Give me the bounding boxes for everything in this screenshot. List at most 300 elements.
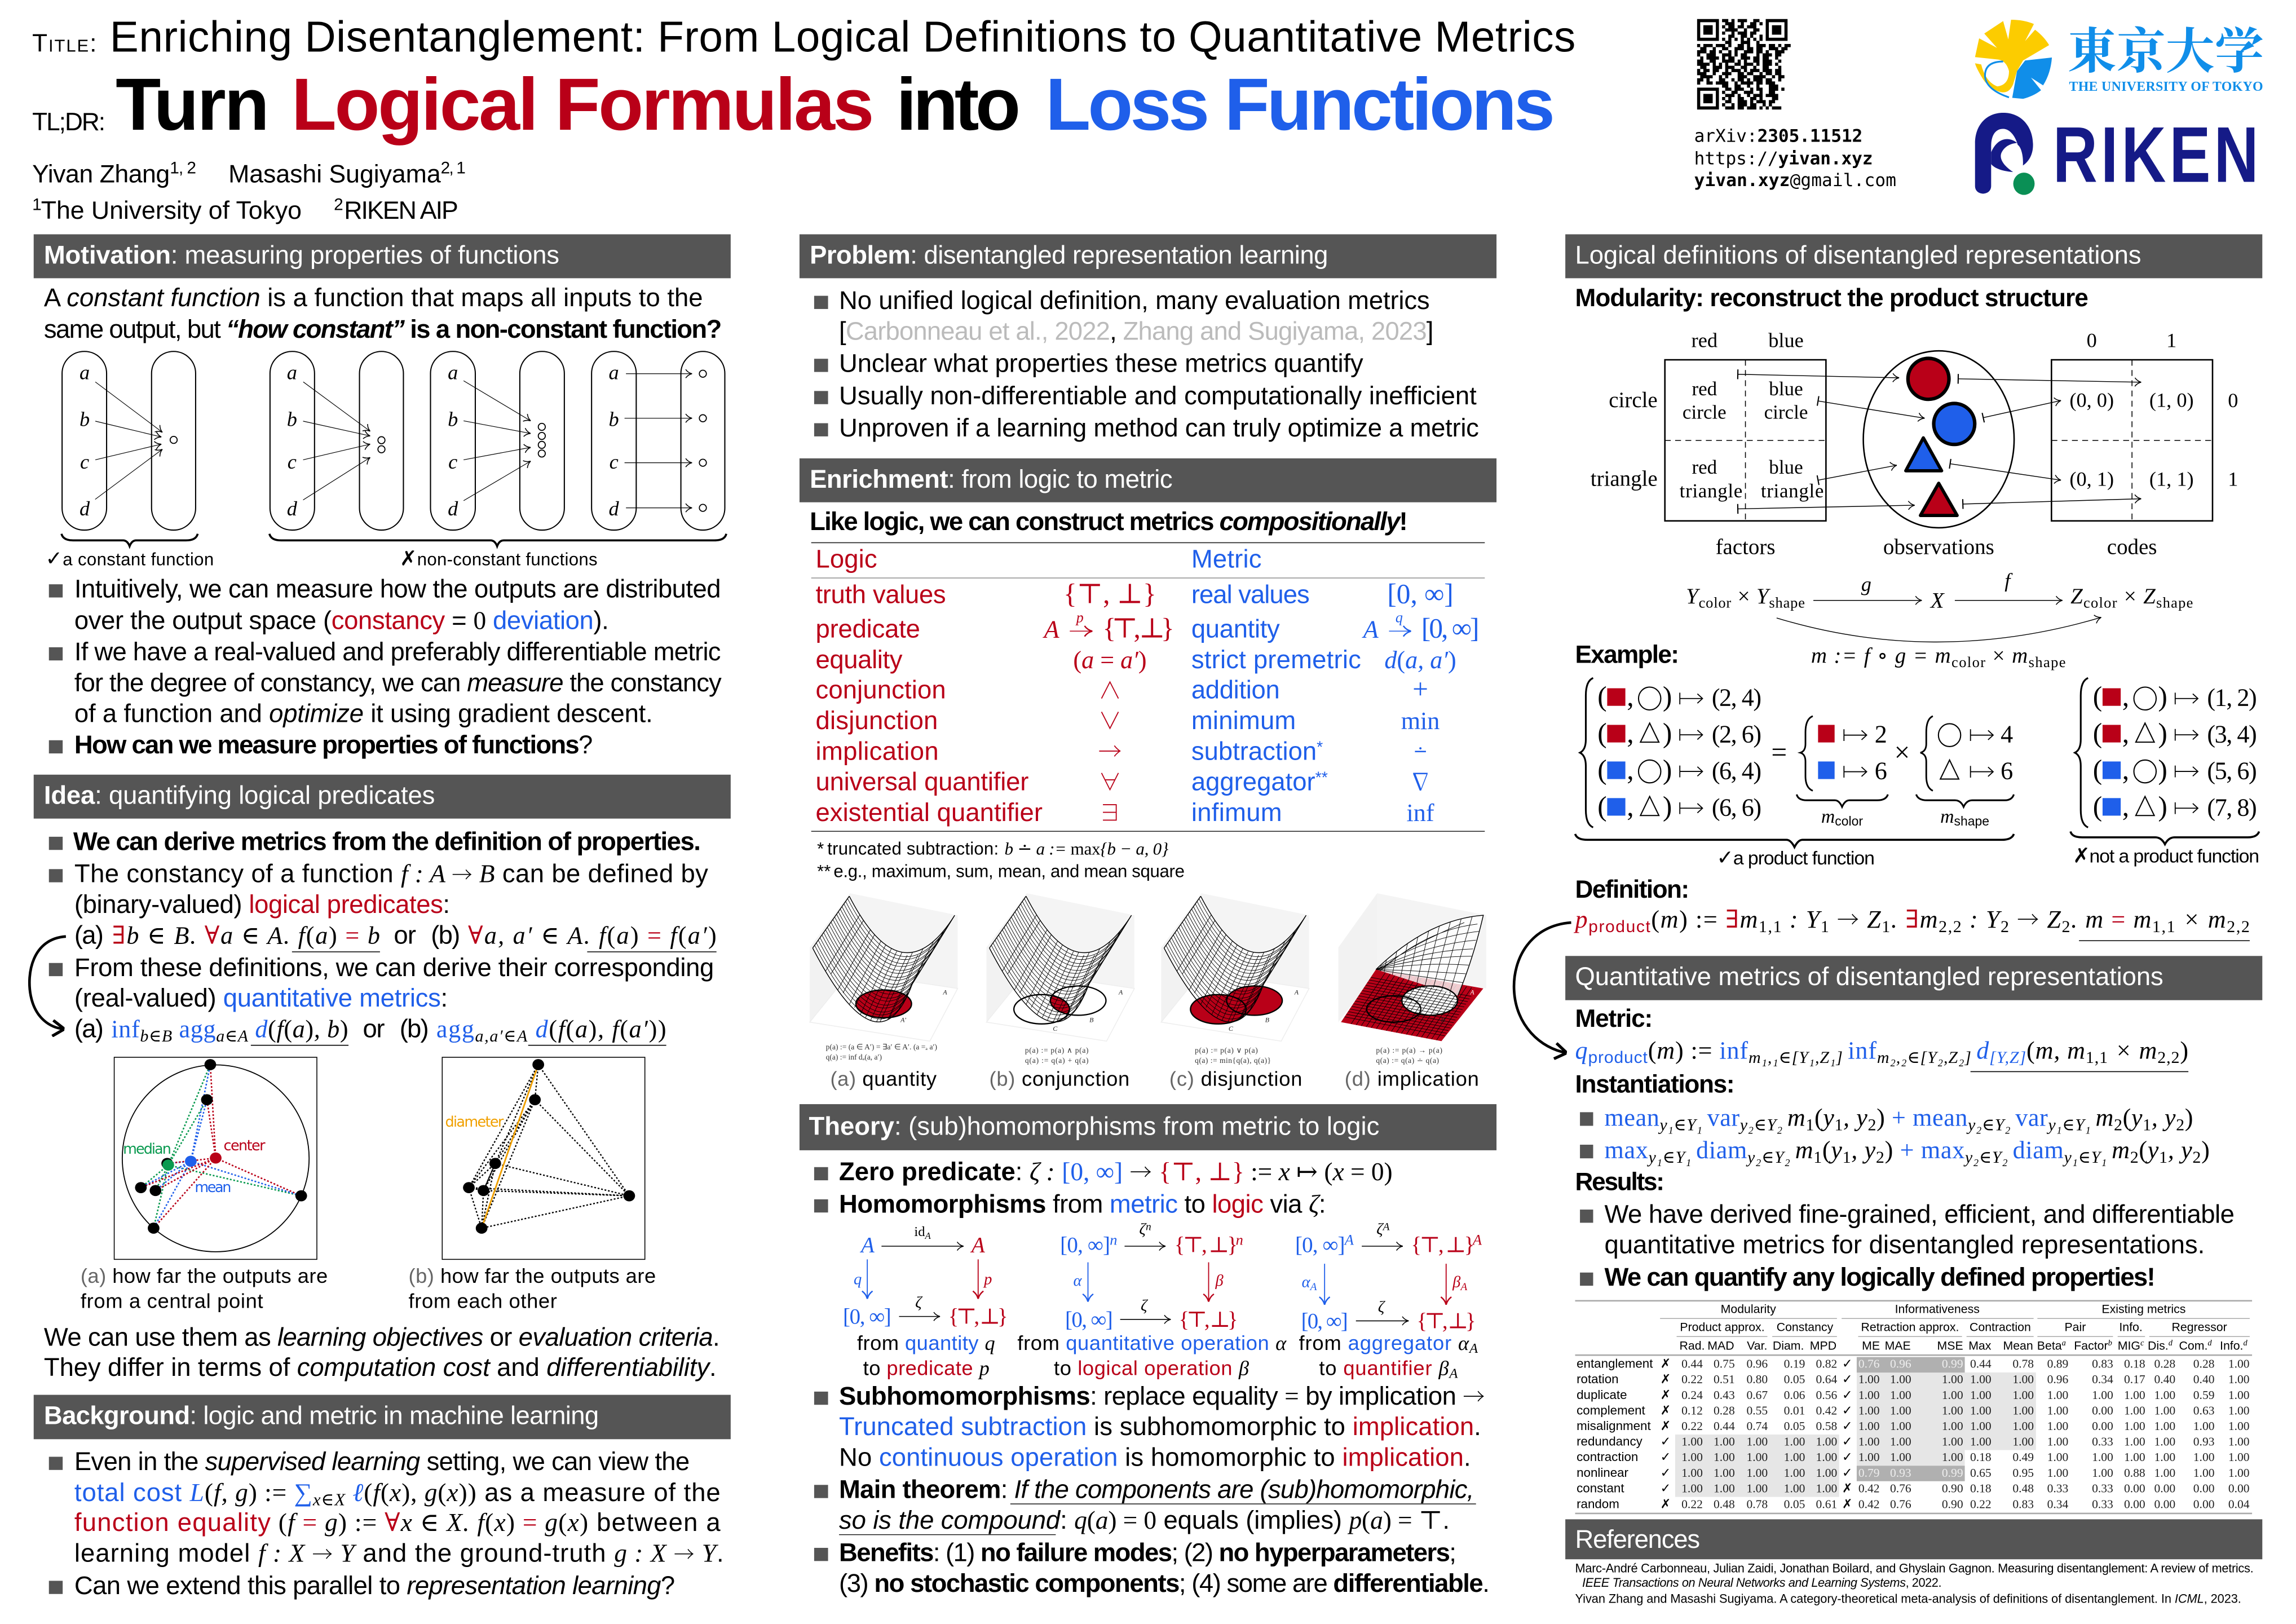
captions under charts: (a) how far the outputs are: [81, 1264, 328, 1287]
table values: 0.99: [1942, 1357, 1963, 1371]
icon: QR code: [1697, 21, 1791, 108]
table values: 1.00: [1858, 1450, 1880, 1464]
icon: ginkgo leaf: [1975, 20, 2052, 99]
diagram labels a b c d: b: [287, 408, 297, 431]
table values: 0.90: [1942, 1482, 1963, 1495]
diagram: quantity to predicate: id: [914, 1224, 925, 1239]
captions under charts: [81, 1264, 656, 1313]
table values: 0.56: [1816, 1388, 1837, 1402]
table group headers: MIG: [2118, 1339, 2144, 1353]
example: not a product function: (: [2093, 791, 2102, 822]
table values: 0.04: [2228, 1497, 2250, 1511]
check marks: ✓: [1661, 1450, 1671, 1464]
table values: 1.00: [1942, 1435, 1963, 1449]
diagram: quantity to predicate: [843, 1224, 1008, 1380]
check marks: ✗: [1661, 1372, 1671, 1387]
table group headers: MPD: [1810, 1339, 1836, 1353]
check marks: ✓: [1842, 1372, 1853, 1387]
example: product function: ,: [1627, 754, 1634, 785]
instantiation formulas: (: [2123, 1104, 2131, 1132]
metric column: +: [1412, 674, 1428, 705]
chart: conjunction surface: p(a) := p(a) ∧ p(a): [1025, 1046, 1089, 1054]
table group headers: d: [2207, 1339, 2212, 1348]
metric column: min: [1401, 707, 1440, 735]
table values: 1.00: [2154, 1435, 2175, 1449]
diagram: aggregator homomorphism: A: [1344, 1231, 1354, 1248]
table values: 0.22: [1970, 1497, 1992, 1511]
brace: non-constant functions: [270, 534, 726, 546]
check marks: ✗: [1842, 1481, 1853, 1496]
check marks: ✗: [1661, 1419, 1671, 1433]
table values: 1.00: [2047, 1435, 2068, 1449]
formula: logical product predicate: 2: [2061, 917, 2070, 936]
diagram: operation homomorphism: [1017, 1221, 1287, 1380]
logic column: ∨: [1098, 702, 1121, 736]
table values: 1.00: [2047, 1450, 2068, 1464]
table values: 0.01: [1784, 1404, 1805, 1417]
table values: 1.00: [2228, 1388, 2250, 1402]
instantiation formulas: y: [1823, 1104, 1834, 1132]
theory bullets: Main theorem: If the components are (sub)homomorphic,: [839, 1475, 1474, 1504]
example: not a product function: (: [2093, 718, 2102, 749]
instantiation formulas: y₁∈Y₁: [1658, 1115, 1707, 1134]
table values: 1.00: [2124, 1435, 2145, 1449]
instantiation formulas: 2: [1867, 1115, 1876, 1134]
problem bullets: No unified logical definition, many evaluation metrics: [839, 286, 1430, 315]
diagram labels a b c d: d: [287, 497, 298, 520]
table values: 1.00: [1681, 1482, 1703, 1495]
diagram: operation homomorphism: β: [1215, 1272, 1224, 1290]
reference list: Marc-André Carbonneau, Julian Zaidi, Jonathan Boilard, and Ghyslain Gagnon. Measuring disentanglement: A review of metrics.: [1575, 1561, 2254, 1576]
instantiation formulas: (: [1814, 1104, 1823, 1132]
table values: 1.00: [1816, 1466, 1837, 1480]
panel: problem: [800, 235, 1496, 442]
diagram: operation homomorphism: n: [1146, 1221, 1151, 1233]
subheading: Like logic, we can construct metrics compositionally!: [810, 507, 1408, 536]
arXiv id: arXiv:2305.11512: [1694, 126, 1862, 147]
diagram: operation homomorphism: ζ: [1141, 1297, 1149, 1314]
chart: conjunction surface: C: [1053, 1025, 1058, 1032]
codes box: [2051, 329, 2238, 559]
diagram: factors observations codes: [1591, 329, 2238, 559]
definitions text: ∃b ∈ B. ∀a ∈ A. f(a) = b: [112, 922, 380, 950]
chart: implication surface: A: [1469, 988, 1474, 996]
chart: quantity surface: q(a) := inf dₐ(a, a′): [826, 1053, 882, 1061]
instantiation formulas: 2: [1876, 1148, 1884, 1167]
chart: implication surface: q(a) := q(a) ∸ q(a): [1376, 1056, 1439, 1065]
diagram: operation homomorphism: to logical operation β: [1054, 1357, 1249, 1380]
theory bullets: so is the compound: q(a) = 0 equals (implies) p(a) = ⊤.: [839, 1506, 1450, 1534]
logic column: (a = a′): [1073, 646, 1147, 674]
example: product function: 4: [2001, 721, 2013, 748]
table values: 0.18: [1970, 1482, 1992, 1495]
heading: enrichment: Enrichment: from logic to metric: [810, 465, 1173, 493]
bullet list: for the degree of constancy, we can measure the constancy: [74, 668, 722, 697]
example: product function: (2, 6): [1712, 721, 1761, 748]
caption: non-constant functions: ✗non-constant functions: [400, 546, 598, 570]
panel: references: [1565, 1519, 2262, 1606]
table values: 0.34: [2092, 1373, 2113, 1386]
metric column: aggregator: [1191, 767, 1315, 796]
table values: 1.00: [2047, 1388, 2068, 1402]
table values: 1.00: [1816, 1435, 1837, 1449]
table values: 0.19: [1784, 1357, 1805, 1371]
formula: quantitative product metric: ): [2180, 1036, 2188, 1064]
instantiation formulas: 2: [2192, 1148, 2201, 1167]
chart: implication surface: B: [1441, 1016, 1445, 1024]
example: product function: ,: [1627, 718, 1634, 749]
table values: 1.00: [2228, 1373, 2250, 1386]
table values: 0.48: [2012, 1482, 2034, 1495]
definitions text: (real-valued) quantitative metrics:: [74, 983, 448, 1012]
chart: conjunction surface: B: [1089, 1016, 1094, 1024]
logic column: ∧: [1098, 672, 1121, 705]
formula: logical product predicate: (: [1651, 906, 1659, 933]
table group headers: Existing metrics: [2101, 1303, 2185, 1316]
chart: quantity surface: (a) quantity: [830, 1067, 937, 1091]
instantiation formulas: diam: [2013, 1136, 2064, 1164]
chart: distance to each other: diameter: [445, 1113, 504, 1130]
instantiation formulas: y: [2148, 1136, 2158, 1164]
row names: complement: [1577, 1403, 1646, 1417]
metric column: subtraction: [1191, 736, 1317, 765]
table values: 0.49: [2012, 1450, 2034, 1464]
logic column: {⊤, ⊥}: [1102, 613, 1175, 644]
instantiation formulas: 1: [2159, 1148, 2167, 1167]
table values: 0.44: [1970, 1357, 1992, 1371]
definitions text: inf: [111, 1015, 140, 1043]
table values: 0.06: [1784, 1388, 1805, 1402]
check marks: ✗: [1661, 1403, 1671, 1418]
example: not a product function: ✗not a product function: [2073, 843, 2259, 867]
check marks: ✓: [1842, 1419, 1853, 1433]
table group headers: Contraction: [1970, 1321, 2031, 1334]
table values: 1.00: [1858, 1419, 1880, 1433]
instantiation formulas: m: [2112, 1136, 2130, 1164]
table footnotes: b ∸ a := max{b − a, 0}: [1005, 839, 1169, 859]
authors: Yivan Zhang: [32, 160, 170, 188]
subheading: example: Example:: [1575, 641, 1679, 668]
diagram labels a b c d: a: [80, 361, 90, 384]
table values: 0.64: [1816, 1373, 1837, 1386]
row names: constant: [1577, 1481, 1624, 1495]
results bullets: We have derived fine-grained, efficient, and differentiable: [1604, 1199, 2235, 1228]
diagram: aggregator homomorphism: [0, ∞]: [1301, 1309, 1348, 1333]
diagram labels a b c d: c: [80, 451, 89, 473]
row names: [1577, 1357, 1653, 1511]
diagram: function composition: Y: [1686, 584, 1698, 608]
example: product function: ): [1663, 718, 1672, 749]
contact links: [1694, 126, 1896, 191]
row names: contraction: [1577, 1450, 1638, 1464]
results bullets: quantitative metrics for disentangled representations.: [1604, 1230, 2205, 1259]
definitions text: d(f(a), f(a′)): [536, 1015, 666, 1043]
factors box: [1591, 329, 1826, 559]
chart: disjunction surface: q(a) := min{q(a), q(a)}: [1195, 1056, 1271, 1065]
table values: 1.00: [2228, 1450, 2250, 1464]
table values: 1.00: [1714, 1482, 1735, 1495]
table values: 0.33: [2047, 1482, 2068, 1495]
table group headers: Dis.: [2148, 1339, 2173, 1353]
table values: 0.76: [1890, 1482, 1911, 1495]
instantiation formulas: ): [1876, 1104, 1891, 1132]
row names: redundancy: [1577, 1435, 1643, 1449]
table values: 1.00: [2092, 1388, 2113, 1402]
table values: 1.00: [2124, 1419, 2145, 1433]
underline: product equation: [2079, 940, 2250, 941]
definitions text: (a): [74, 1014, 104, 1043]
formula: logical product predicate: 2,2: [2227, 917, 2250, 936]
table values: 1.00: [2012, 1388, 2034, 1402]
instantiation formulas: m: [1795, 1136, 1813, 1164]
formula: quantitative product metric: q: [1575, 1036, 1588, 1064]
table group headers: Max: [1968, 1339, 1992, 1353]
table values: 1.00: [1746, 1482, 1768, 1495]
instantiation formulas: m: [1787, 1104, 1805, 1132]
table values: 1.00: [2124, 1388, 2145, 1402]
factors box: triangle: [1591, 467, 1658, 491]
example: not a product function: [2070, 678, 2259, 867]
example: not a product function: (1, 2): [2207, 684, 2257, 712]
table footnotes: **: [817, 862, 831, 881]
tldr headline: Logical Formulas: [292, 63, 874, 145]
japanese wordmark: 東京大学: [2068, 12, 2264, 82]
heading: references: [1565, 1519, 2262, 1559]
chart: disjunction surface: B: [1265, 1016, 1270, 1024]
definitions text: (b): [431, 921, 460, 950]
instantiation formulas: , y: [1851, 1136, 1876, 1164]
row names: nonlinear: [1577, 1466, 1629, 1480]
instantiation formulas: ): [2201, 1136, 2210, 1164]
check marks: ✓: [1842, 1403, 1853, 1418]
table values: 1.00: [1681, 1450, 1703, 1464]
instantiation formulas: , y: [2152, 1104, 2176, 1132]
formula: logical product predicate: = m: [2111, 906, 2151, 933]
metric column: real values: [1191, 580, 1310, 608]
definitions text: From these definitions, we can derive their corresponding: [74, 953, 714, 982]
table group headers: Pair: [2064, 1321, 2086, 1334]
table values: 1.00: [2012, 1404, 2034, 1417]
instantiation formulas: max: [1604, 1136, 1648, 1164]
example: product function: color: [1835, 814, 1863, 828]
heading: background: [34, 1395, 731, 1439]
authors: 1, 2: [170, 159, 196, 178]
panel: idea: [29, 775, 731, 1382]
formula: m decomposition: m: [2012, 643, 2028, 668]
factors box: red: [1692, 329, 1717, 351]
instantiation formulas: + mean: [1892, 1104, 1967, 1132]
affiliations: The University of Tokyo: [41, 197, 302, 224]
table values: 0.75: [1714, 1357, 1735, 1371]
instantiation formulas: y: [1831, 1136, 1842, 1164]
row names: random: [1577, 1497, 1619, 1511]
table values: 0.17: [2124, 1373, 2145, 1386]
heading: motivation: [34, 235, 731, 278]
captions under charts: from each other: [409, 1290, 557, 1313]
diagram labels a b c d: c: [448, 451, 457, 473]
observations ellipse: observations: [1883, 535, 1994, 559]
instantiation formulas: m: [2096, 1104, 2113, 1132]
table rules: [1660, 1318, 2250, 1336]
example: product function: [1575, 678, 2014, 870]
title block: [32, 14, 1575, 224]
table group headers: d: [2169, 1339, 2173, 1348]
codes box: codes: [2107, 535, 2157, 559]
table values: 1.00: [1746, 1435, 1768, 1449]
chart: distance to central point: median: [123, 1140, 171, 1157]
brace: constant function: [61, 534, 198, 546]
table values: 0.40: [2193, 1373, 2215, 1386]
affiliations: RIKEN AIP: [344, 197, 458, 224]
table group headers: Product approx.: [1680, 1321, 1765, 1334]
table: metric results: [1575, 1301, 2252, 1513]
instantiation formulas: [1580, 1104, 2210, 1167]
table values: 1.00: [2228, 1466, 2250, 1480]
logic column: equality: [815, 645, 903, 674]
table values: 0.05: [1784, 1497, 1805, 1511]
table group headers: a: [2062, 1339, 2066, 1348]
table values: 1.00: [2092, 1450, 2113, 1464]
table values: 0.93: [2193, 1435, 2215, 1449]
table values: 1.00: [2047, 1404, 2068, 1417]
table values: 1.00: [1890, 1404, 1911, 1417]
example: product function: ): [1663, 754, 1672, 785]
results bullets: We can quantify any logically defined properties!: [1604, 1263, 2156, 1291]
bullet list: How can we measure properties of functions?: [74, 730, 593, 759]
example: not a product function: ): [2158, 791, 2167, 822]
example: product function: m: [1821, 806, 1835, 827]
table values: 1.00: [2124, 1450, 2145, 1464]
table values: 0.58: [1816, 1419, 1837, 1433]
tldr headline: Turn: [116, 63, 270, 145]
check marks: ✗: [1661, 1497, 1671, 1511]
diagram: operation homomorphism: {⊤, ⊥}: [1179, 1308, 1238, 1332]
codes box: (0, 0): [2069, 389, 2114, 411]
theory bullets: (3) no stochastic components; (4) some are differentiable.: [839, 1569, 1490, 1597]
diagram: aggregator homomorphism: from aggregator α: [1299, 1331, 1469, 1354]
check marks: ✓: [1842, 1450, 1853, 1464]
check marks: ✓: [1661, 1435, 1671, 1449]
problem bullets: Unproven if a learning method can truly optimize a metric: [839, 413, 1479, 442]
table values: 1.00: [1784, 1482, 1805, 1495]
metric column: addition: [1191, 676, 1280, 704]
diagram: function composition: ×: [1732, 584, 1756, 608]
intro text: [44, 283, 722, 343]
example: product function: ×: [1895, 736, 1910, 767]
factors box: factors: [1716, 535, 1776, 559]
chart: disjunction surface: C: [1229, 1025, 1234, 1032]
chart: quantity surface: A: [942, 988, 947, 996]
tldr label: TL;DR:: [32, 108, 105, 136]
definitions text: or: [363, 1014, 385, 1043]
diagram: aggregator homomorphism: A: [1448, 1366, 1458, 1382]
subheading: metric: Metric:: [1575, 1005, 1653, 1032]
formula: logical product predicate: . m: [2071, 906, 2110, 933]
formula: logical product predicate: m) := ∃m: [1661, 906, 1758, 933]
instantiation formulas: y₂∈Y₂: [1963, 1148, 2012, 1167]
reference list: [1575, 1561, 2254, 1606]
example: not a product function: (: [2093, 754, 2102, 785]
formula: logical product predicate: 1,1: [1759, 917, 1782, 936]
subheading: modularity: Modularity: reconstruct the product structure: [1575, 284, 2089, 312]
table values: 1.00: [1746, 1450, 1768, 1464]
diagram: operation homomorphism: from quantitative operation α: [1017, 1331, 1287, 1354]
theory bullets: Subhomomorphisms: replace equality = by implication →: [839, 1380, 1485, 1411]
metric column: minimum: [1191, 706, 1296, 735]
table group headers: Var.: [1747, 1339, 1767, 1353]
table values: 1.00: [2154, 1450, 2175, 1464]
example: product function: (2, 4): [1712, 684, 1761, 712]
table values: 0.00: [2154, 1497, 2175, 1511]
background text: Even in the supervised learning setting, we can view the: [74, 1447, 690, 1476]
factors box: circle: [1609, 388, 1658, 412]
captions under charts: from a central point: [81, 1290, 263, 1313]
diagram: quantity to predicate: A: [970, 1233, 985, 1257]
table group headers: b: [2108, 1339, 2112, 1348]
metric column: inf: [1407, 799, 1434, 827]
observations ellipse: [1864, 351, 2014, 559]
table group headers: Mean: [2003, 1339, 2033, 1353]
table values: 1.00: [2193, 1419, 2215, 1433]
diagram labels a b c d: c: [288, 451, 297, 473]
instantiation formulas: 2: [2176, 1115, 2184, 1134]
diagram: function composition: Z: [2143, 584, 2156, 608]
check marks: ✓: [1661, 1466, 1671, 1480]
instantiation formulas: y₂∈Y₂: [1966, 1115, 2015, 1134]
table values: 1.00: [1784, 1435, 1805, 1449]
bullet list: [49, 575, 722, 759]
formula: logical product predicate: 1,1: [2152, 917, 2175, 936]
table values: 0.00: [2193, 1497, 2215, 1511]
instantiation formulas: (: [2139, 1136, 2147, 1164]
table values: 0.67: [1746, 1388, 1768, 1402]
formula: logical product predicate: 2: [2001, 917, 2009, 936]
instantiation formulas: , y: [2168, 1136, 2192, 1164]
instantiation formulas: y₂∈Y₂: [1746, 1148, 1795, 1167]
table values: 0.42: [1858, 1482, 1880, 1495]
definitions text: d(f(a), b): [255, 1015, 348, 1043]
captions under charts: (b) how far the outputs are: [409, 1264, 656, 1287]
logic column: universal quantifier: [815, 767, 1028, 796]
example: not a product function: ,: [2122, 718, 2129, 749]
diagram labels a b c d: b: [448, 408, 458, 431]
metric column: [0, ∞]: [1421, 613, 1479, 644]
factors box: circle: [1764, 401, 1808, 423]
chart: conjunction surface: A: [1118, 988, 1123, 996]
table values: 1.00: [1784, 1450, 1805, 1464]
formula: logical product predicate: → Z: [1837, 903, 1881, 934]
english wordmark: THE UNIVERSITY OF TOKYO: [2069, 80, 2263, 94]
instantiation formulas: y₁∈Y₁: [2046, 1115, 2095, 1134]
table footnotes: e.g., maximum, sum, mean, and mean square: [833, 862, 1185, 881]
formula: logical product predicate: → Z: [2017, 903, 2061, 934]
diagram: function composition: color: [2083, 594, 2117, 611]
table: logic vs metric: [811, 542, 1485, 831]
example: not a product function: (: [2093, 681, 2102, 712]
formula: logical product predicate: 1: [1821, 917, 1829, 936]
problem bullets: [814, 286, 1479, 442]
definitions text: We can derive metrics from the definition of properties.: [73, 827, 701, 855]
row names: entanglement: [1577, 1357, 1653, 1371]
arrow: logic to metric: [29, 937, 66, 1029]
panel: enrichment: [800, 458, 1496, 1091]
table values: 0.00: [2193, 1482, 2215, 1495]
heading: theory: Theory: (sub)homomorphisms from metric to logic: [809, 1112, 1379, 1141]
check marks: [1661, 1357, 1853, 1511]
table values: 0.28: [2154, 1357, 2175, 1371]
metric column: Metric: [1191, 545, 1262, 573]
diagram: aggregator homomorphism: A: [1468, 1341, 1478, 1356]
